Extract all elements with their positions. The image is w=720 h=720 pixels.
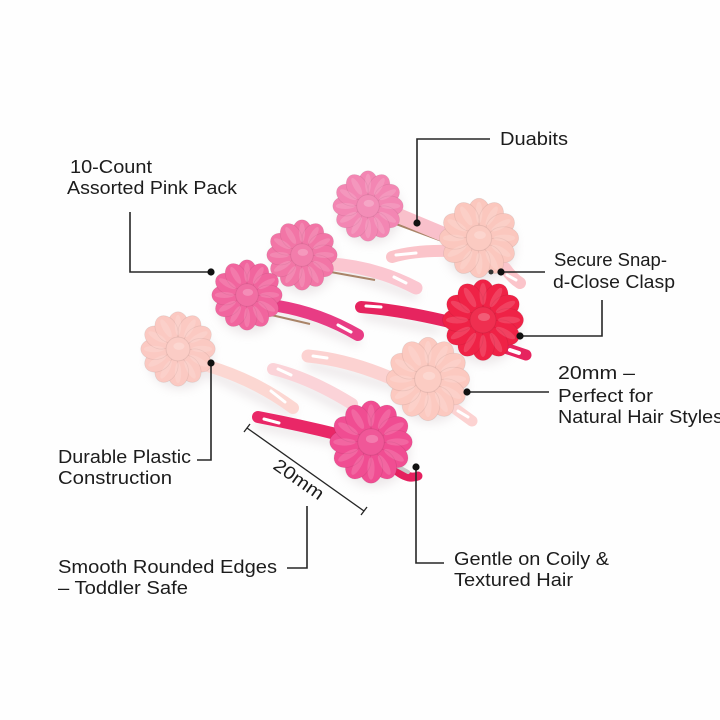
callout: 20mm Perfect for Natural Hair Styles: 20mm – — [558, 363, 635, 383]
flower: pink left — [211, 259, 283, 331]
flower: pink middle — [266, 219, 338, 291]
clip: peach left — [208, 366, 293, 408]
clip: light pink behind hot pink flower — [273, 369, 352, 404]
flower: peach lower — [386, 337, 470, 421]
leader line: red flower — [516, 300, 602, 340]
callout: Smooth Rounded Edges Toddler Safe: Smooth Rounded Edges — [58, 557, 277, 577]
callout: Secure Snap-d-Close Clasp: Secure Snap- — [554, 250, 667, 270]
callout: Durable Plastic Construction: Durable Plastic — [58, 447, 191, 467]
callout: 10-Count Assorted Pink Pack: 10-Count — [70, 157, 152, 177]
callout: Smooth Rounded Edges Toddler Safe — [58, 506, 307, 598]
callout: Gentle on Coily and Textured Hair: Textured Hair — [454, 570, 573, 590]
clip: pale pink middle — [325, 264, 416, 288]
callout: 20mm Perfect for Natural Hair Styles: Natural Hair Styles — [558, 407, 720, 427]
flower: red — [442, 279, 524, 361]
callout: 20mm Perfect for Natural Hair Styles — [463, 363, 720, 427]
callout: Secure Snap-d-Close Clasp — [488, 250, 675, 292]
callout: Duabits — [413, 129, 568, 227]
callout: Durable Plastic Construction: Construction — [58, 468, 172, 488]
callout: 20mm Perfect for Natural Hair Styles: Perfect for — [558, 386, 653, 406]
clip: hot pink lower — [258, 417, 418, 477]
flower: peach left — [140, 311, 216, 387]
flower: peach top-right — [439, 198, 519, 278]
callout: Secure Snap-d-Close Clasp: d-Close Clasp — [553, 272, 675, 292]
callout: Durable Plastic Construction — [58, 359, 215, 488]
clip: red — [361, 306, 526, 355]
callout: Duabits: Duabits — [500, 129, 568, 149]
callout: 10-Count Assorted Pink Pack: Assorted Pink Pack — [67, 178, 238, 198]
callout: 10-Count Assorted Pink Pack — [67, 157, 238, 276]
dimension: 20mm: 20mm — [270, 455, 328, 504]
clip: peach top-right — [392, 251, 450, 257]
callout: Smooth Rounded Edges Toddler Safe: – Toddler Safe — [58, 578, 188, 598]
flower: pink top — [332, 170, 404, 242]
soft product shadows — [147, 180, 520, 487]
flower: hot pink lower — [329, 400, 413, 484]
clip: peach lower — [308, 356, 472, 421]
clip: top pale pink — [388, 212, 520, 283]
callout: Gentle on Coily and Textured Hair — [412, 463, 609, 590]
dimension: 20mm — [244, 424, 367, 515]
callout: Gentle on Coily and Textured Hair: Gentle on Coily & — [454, 549, 609, 569]
clip: hot pink left — [267, 306, 358, 335]
